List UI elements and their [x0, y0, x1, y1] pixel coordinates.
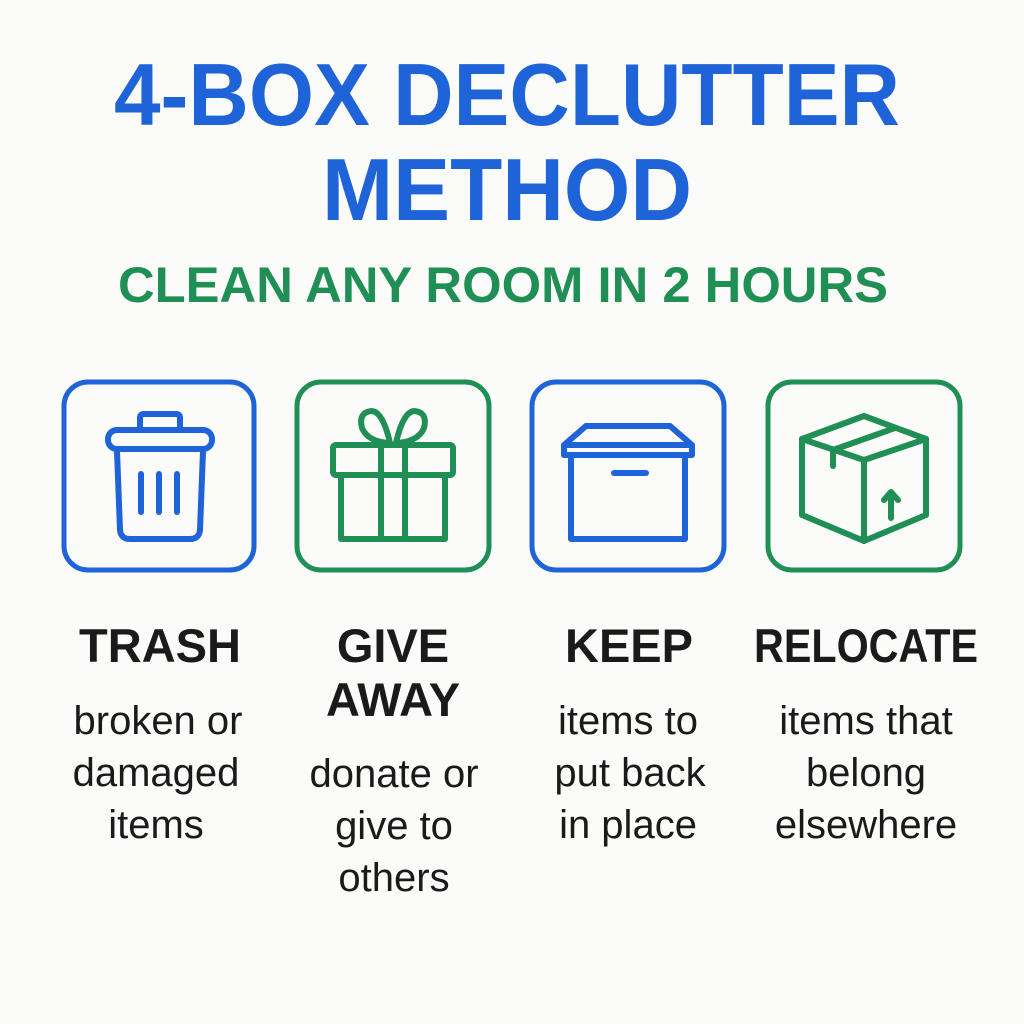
- labels: [79, 619, 978, 726]
- descriptions: put back: [554, 751, 707, 795]
- descriptions: others: [338, 856, 450, 900]
- descriptions: items: [108, 803, 204, 847]
- descriptions: items that: [779, 699, 953, 743]
- descriptions: elsewhere: [775, 803, 957, 847]
- descriptions: belong: [806, 751, 926, 795]
- labels: GIVE: [337, 619, 449, 672]
- labels: AWAY: [326, 673, 460, 726]
- panel: give away: [297, 382, 489, 570]
- labels: RELOCATE: [754, 619, 978, 672]
- descriptions: in place: [559, 803, 697, 847]
- panel: trash: [64, 382, 254, 570]
- subtitle: CLEAN ANY ROOM IN 2 HOURS: [118, 257, 888, 313]
- descriptions: give to: [335, 804, 453, 848]
- icon: trash can: [108, 414, 212, 539]
- icon: storage box: [564, 426, 692, 539]
- panel: keep: [532, 382, 724, 570]
- descriptions: donate or: [309, 752, 479, 796]
- panel: relocate: [768, 382, 960, 570]
- icon: package with arrow: [802, 416, 926, 541]
- descriptions: broken or: [74, 699, 242, 743]
- labels: KEEP: [565, 619, 693, 672]
- labels: TRASH: [79, 619, 241, 672]
- title: METHOD: [322, 140, 692, 239]
- descriptions: damaged: [73, 751, 239, 795]
- title: [114, 45, 900, 239]
- descriptions: items to: [558, 699, 698, 743]
- descriptions: [73, 699, 957, 900]
- title: 4-BOX DECLUTTER: [114, 45, 900, 144]
- icon: gift: [333, 411, 453, 539]
